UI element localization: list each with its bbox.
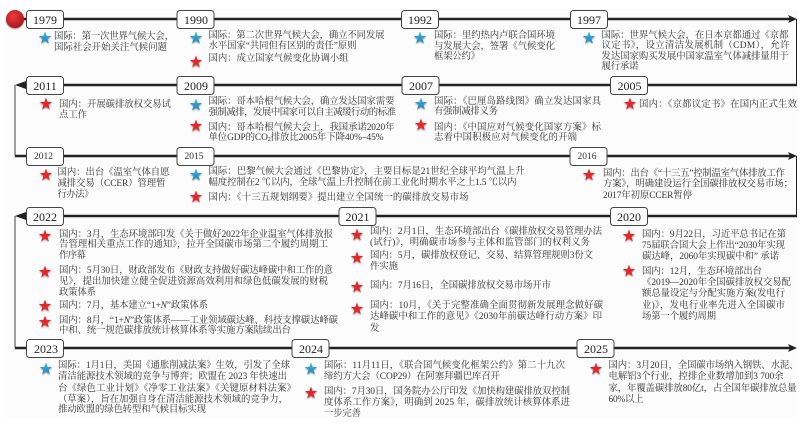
year 2011: 2011 [33,79,57,93]
year 2015 [177,148,525,203]
year 2021: 国内：7月16日，全国碳排放权交易市场开市 [370,279,551,291]
year 2023 [26,340,296,415]
year 2022: 国内：3月，生态环境部印发《关于做好2022年企业温室气体排放报 [59,228,333,240]
year 1990: 1990 [184,13,208,27]
year 2009: 单位GDP的CO [208,133,268,143]
year 1990 [177,10,385,67]
year 2021: 达峰碳中和工作的意见》《2030年前碳达峰行动方案》印 [370,310,602,322]
year 2015: 2015 [184,152,204,162]
year 2024: 缔约方大会（COP29）在阿塞拜疆巴库召开 [324,370,501,382]
year 1992: 1992 [408,13,432,27]
year 2016: 2017年初原CCER暂停 [603,189,693,201]
year 2011: 点工作 [59,108,88,120]
year 2009: 国内：哥本哈根气候大会上，我国承诺2020年 [208,121,394,133]
year 2020: 业)》，发电行业率先进入全国碳市 [642,299,785,311]
year 2007: 2007 [409,79,433,93]
year 2025: 家，年覆盖碳排放80亿t，占全国年碳排放总量 [608,382,796,394]
year 1992: 国际：里约热内卢联合国环境 [434,29,555,41]
year 2022: 2022 [33,210,57,224]
year 2012: 减排交易（CCER）管理暂 [58,177,166,189]
year 2009: 强制减排，发展中国家可以自主减缓行动的标准 [208,106,397,118]
year 2024: 国际：11月11日，《联合国气候变化框架公约》第二十九次 [324,359,566,371]
year 2022: 中和、统一规范碳排放统计核算体系等实施方案陆续出台 [59,324,292,336]
year 1979 [26,10,174,53]
year 2005 [610,76,798,110]
year 2024: 度体系工作方案》，明确到 2025 年，碳排放统计核算体系进 [324,396,571,408]
year 1997: 履行承诺 [602,60,639,72]
year 2007: 志着中国积极应对气候变化的开端 [434,131,578,143]
year 2015: 幅度控制在2 ℃以内，全球气温上升控制在前工业化时期水平之上1.5 ℃以内 [208,176,516,188]
year 2023: 台《绿色工业计划》《净零工业法案》《关键原材料法案》 [58,382,296,394]
year 1997: 1997 [577,13,601,27]
year 2020: 碳达峰，2060年实现碳中和” 承诺 [642,250,780,262]
year 2007 [402,76,602,143]
year 2009 [177,76,397,143]
year 1979: 国际：第一次世界气候大会， [54,30,174,42]
year 1997 [570,10,790,72]
year 2011: 国内：开展碳排放权交易试 [59,98,172,110]
year 2023: 2023 [34,342,58,356]
year 2021: (试行)》，明确碳市场参与主体和监管部门的权利义务 [370,236,591,248]
year 2009: 2 [268,137,271,143]
year 2016 [570,148,793,201]
year 2021: 国内：5月，碳排放权登记、交易、结算管理规则3份文 [370,249,594,261]
year 2020: 额总量设定与分配实施方案(发电行 [642,287,786,299]
year 2022: 国内：7月，基本建立“1+N”政策体系 [59,299,209,311]
year 2022: 国内：5月30日，财政部发布《财政支持做好碳达峰碳中和工作的意 [59,264,334,276]
year 2023: （草案），旨在加强自身在清洁能源技术领域的竞争力， [58,393,288,405]
year 1990: 国内：成立国家气候变化协调小组 [208,52,349,64]
year 2020: 《2019—2020年全国碳排放权交易配 [642,276,792,288]
year 2023: 国际：1月1日，美国《通胀削减法案》生效，引发了全球 [58,359,291,371]
year 2020: 国内：12月，生态环境部出台 [642,265,763,277]
year 2025 [577,340,798,405]
year 2016: 2016 [578,152,597,162]
year 2009: 国际：哥本哈根气候大会，确立发达国家需要 [208,95,395,107]
year 2021: 2021 [346,210,370,224]
year 2020: 2020 [617,210,641,224]
year 2022: 告管理相关重点工作的通知》，拉开全国碳市场第二个履约周期工 [59,238,328,250]
year 1997: 议定书》，设立清洁发展机制（CDM），允许 [602,39,790,51]
year 2007: 国际：《巴厘岛路线图》确立发达国家具 [434,95,602,107]
year 2024 [292,340,571,419]
year 2020 [610,208,792,322]
year 2009: 2009 [184,79,208,93]
year 2025: 2025 [584,342,608,356]
year 2007: 国内：《中国应对气候变化国家方案》标 [434,121,602,133]
year 1992 [402,10,556,62]
year 1992: 与发展大会，签署《气候变化 [434,40,556,52]
year 2022: 见》，提出加快建立健全促进资源高效利用和绿色低碳发展的财税 [59,275,329,287]
year 2022: 作序幕 [59,249,87,261]
timeline path with connectors and arrows [15,15,797,352]
year 1990: 国际：第二次世界气候大会，确立不同发展 [208,29,385,41]
year 2016: 国内：出台《“十三五”控制温室气体排放工作 [603,167,786,179]
year 2011 [26,76,172,120]
year 1992: 框架公约》 [434,50,480,62]
year 2015: 国际：巴黎气候大会通过《巴黎协定》，主要目标是21世纪全球平均气温上升 [208,165,525,177]
year 2021: 国内：2月1日，生态环境部出台《碳排放权交易管理办法 [370,225,603,237]
year 1997: 国际：世界气候大会，在日本京都通过《京都 [602,29,789,41]
year 1979: 1979 [33,13,57,27]
year 2021 [339,208,604,334]
year 2012: 行办法》 [58,188,94,200]
year 2015: 国内：《十三五规划纲要》提出建立全国统一的碳排放交易市场 [208,191,468,203]
year 2009: 排放比2005年下降40%–45% [271,131,384,143]
year 1990: 水平国家“共同但有区别的责任”原则 [208,40,356,52]
year 2012 [26,148,170,200]
year 2020: 75届联合国大会上作出“2030年实现 [642,239,786,251]
year 2022: 政策体系 [59,286,97,298]
year 2012: 2012 [34,152,53,162]
year 2012: 国内：出台《温室气体自愿 [58,166,170,178]
year 2025: 60%以上 [608,393,644,405]
year 2025: 电解铝3个行业，控排企业数增加到3 700余 [608,370,784,382]
year 2022 [26,208,339,336]
year 2020: 场第一个履约周期 [642,310,716,322]
year 2021: 国内：10月，《关于完整准确全面贯彻新发展理念做好碳 [370,299,604,311]
year 1979: 国际社会开始关注气候问题 [54,41,168,53]
year 1997: 发达国家购买发展中国家温室气体减排量用于 [602,50,788,62]
icon: start ball [6,10,24,28]
year 2016: 方案》，明确建设运行全国碳排放权交易市场； [603,178,793,190]
year 2007: 有强制减排义务 [434,105,499,117]
year 2021: 发 [370,322,379,334]
year 2024: 2024 [299,342,323,356]
year 2005: 国内：《京都议定书》在国内正式生效 [639,98,798,110]
year 2005: 2005 [618,79,642,93]
year 2024: 一步完善 [324,407,361,419]
year 2021: 件实施 [370,260,399,272]
year 2024: 国内：7月30日，国务院办公厅印发《加快构建碳排放双控制 [324,385,570,397]
year 2023: 推动欧盟的绿色转型和气候目标实现 [58,403,207,415]
year 2022: 国内：8月，“1+N”政策体系——工业领域碳达峰、科技支撑碳达峰碳 [59,314,339,326]
year 2023: 清洁能源技术领域的竞争与博弈；欧盟在 2023 年快速出 [58,370,287,382]
year 2025: 国内：3月20日，全国碳市场纳入钢铁、水泥、 [608,359,798,371]
year 2020: 国内：9月22日，习近平总书记在第 [642,228,786,240]
